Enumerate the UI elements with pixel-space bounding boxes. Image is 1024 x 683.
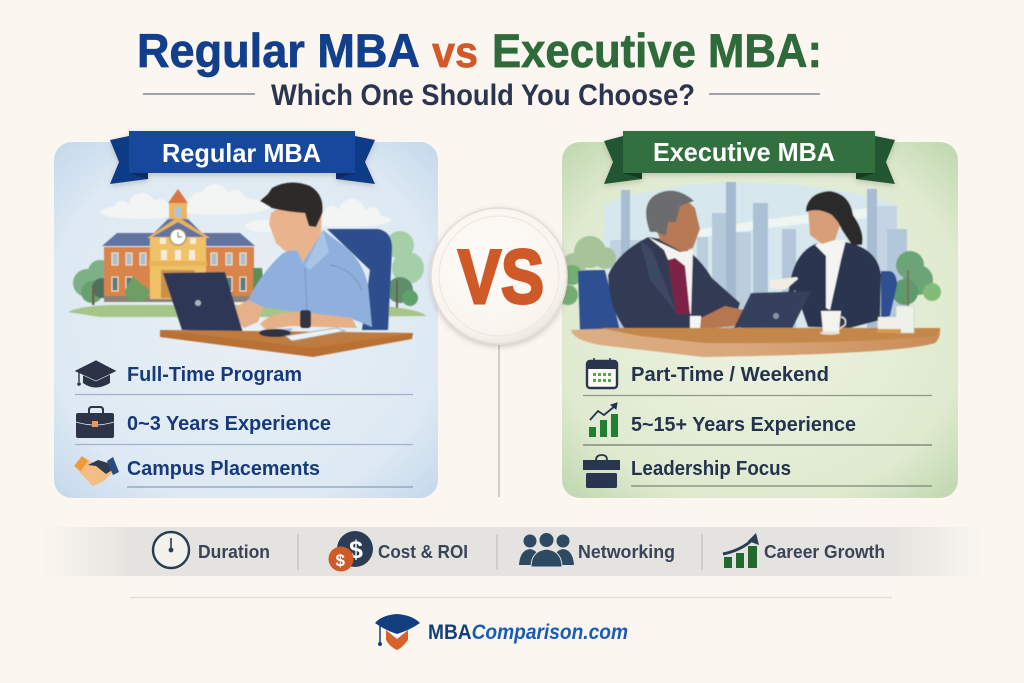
logo [375,614,628,650]
coffee cup [820,311,846,335]
icon: dollar coins: $ [336,551,346,570]
list: Regular MBA features [74,360,413,487]
woman: suit [788,240,881,328]
icon: graduation cap [74,360,117,388]
label: duration: Duration [198,541,270,562]
woman: head and dark hair [808,205,840,244]
blue chair [327,229,392,330]
icon: dollar coins [328,531,373,572]
icon: handshake [74,456,119,486]
title [137,24,822,77]
title: Executive MBA: [492,24,822,77]
trees [558,236,941,315]
student: head [269,195,322,262]
ground [68,305,427,317]
man: head and grey hair [655,203,700,252]
table [571,328,940,357]
icon: briefcase [76,407,114,438]
feature: years of experience: 0~3 Years Experience [127,412,331,435]
subtitle: Which One Should You Choose? [271,79,695,112]
icon: cap and shield [375,614,420,650]
comparison strip [40,527,985,576]
illustration: executives at a table with city skyline [558,182,941,357]
icon: calendar [587,358,617,388]
feature: years of experience: 5~15+ Years Experience [631,413,856,436]
label: cost and ROI: Cost & ROI [378,541,468,562]
ribbon: Executive MBA [604,131,895,184]
icon: clock [153,532,189,568]
ribbon: Executive MBA: Executive MBA [653,137,835,167]
left and right trees [73,231,424,308]
icon: people [519,532,574,567]
icon: dollar coins: $ [349,536,363,564]
icon: leadership briefcase [583,455,620,488]
campus building [102,189,264,302]
feature: leadership focus: Leadership Focus [631,457,791,480]
student: arms [234,300,263,328]
laptop [704,291,811,340]
feature: part-time weekend: Part-Time / Weekend [631,363,829,386]
title: vs [432,28,478,77]
icon: career growth chart [723,533,759,568]
feature: full-time program: Full-Time Program [127,363,302,386]
man: suit [608,237,740,337]
wordmark: MBAComparison.com [428,621,628,644]
blue chairs [578,270,620,330]
ribbon: Regular MBA [110,131,375,184]
list: Executive MBA features [583,358,932,488]
woman: pointing hand [770,277,798,290]
label: networking: Networking [578,541,675,562]
panel: Executive MBA [558,131,958,498]
VS badge [431,208,567,344]
laptop [163,272,243,333]
skyline window [604,182,907,330]
desk [160,330,413,357]
panel: Regular MBA [54,131,438,498]
student: hair [260,182,322,227]
student: shirt [248,230,372,327]
icon: growth chart [589,403,618,437]
VS badge: VS [458,235,544,320]
illustration: student at laptop in front of campus [68,182,427,357]
title: Regular MBA [137,24,420,77]
label: career growth: Career Growth [764,541,885,562]
clouds [100,184,391,232]
paper stack and holder [877,306,914,333]
feature: campus placements: Campus Placements [127,457,320,480]
ribbon: Regular MBA: Regular MBA [162,138,321,168]
